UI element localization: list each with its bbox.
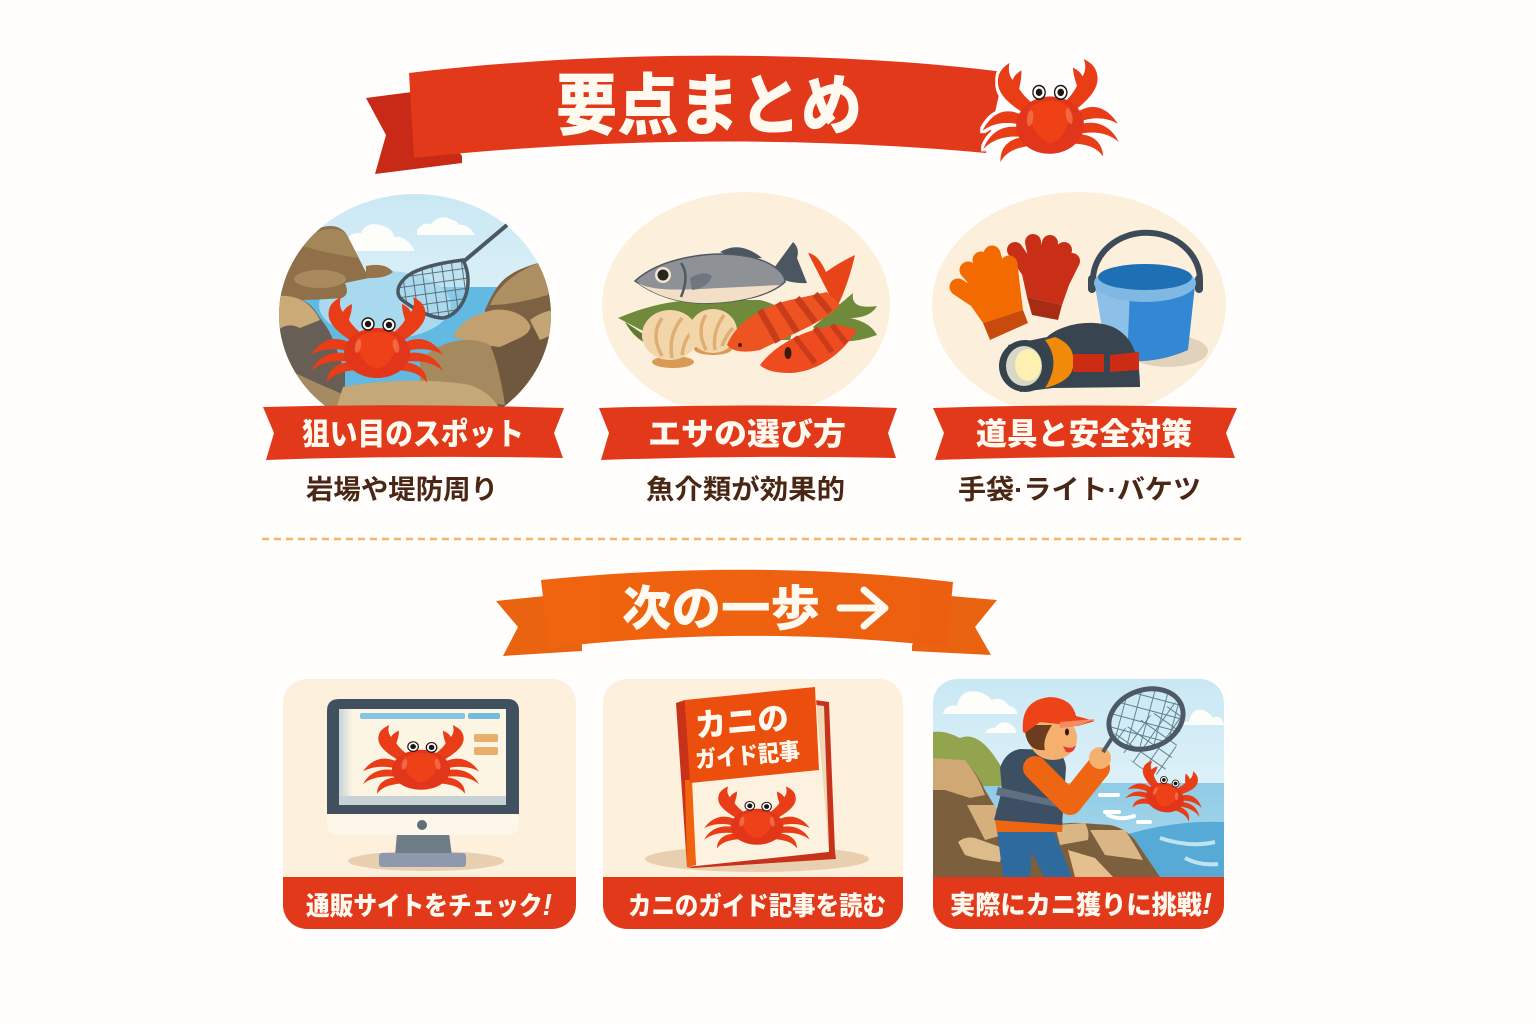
book subtitle: ガイド記事 [694, 738, 801, 773]
card: shop site [283, 679, 576, 929]
caption: 魚介類が効果的 [646, 474, 845, 505]
heading: 次の一歩 [622, 583, 820, 636]
right tail [912, 596, 997, 655]
icon: crab [311, 297, 443, 383]
ribbon: spot [263, 405, 564, 460]
icon: arrow [840, 590, 885, 626]
card: guide article [603, 679, 903, 929]
panel: spot [263, 190, 564, 505]
illustration: fish, clams and bait [602, 192, 890, 418]
banner tail [366, 92, 462, 174]
illustration: rocky shore with crab and net [279, 194, 551, 406]
banner body [541, 570, 953, 648]
label text: カニのガイド記事を読む [628, 891, 886, 921]
caption: 岩場や堤防周り [306, 475, 498, 505]
label bar [283, 877, 576, 929]
illustration: person catching crab at shore [933, 679, 1224, 884]
banner body [409, 56, 1004, 158]
title text: 要点まとめ [556, 69, 862, 144]
ribbon label: エサの選び方 [648, 417, 846, 452]
icon: guide book [645, 687, 869, 872]
illustration: gloves, bucket and headlamp [932, 192, 1226, 418]
label bar [603, 877, 903, 929]
title banner [366, 56, 1004, 174]
icon: hand net [398, 225, 507, 318]
label text: 実際にカニ獲りに挑戦! [950, 886, 1212, 921]
label text: 通販サイトをチェック! [306, 887, 552, 922]
next step banner [496, 570, 997, 656]
ribbon label: 道具と安全対策 [976, 417, 1192, 452]
panel: gear [932, 192, 1237, 505]
icon: title crab [979, 57, 1120, 163]
ribbon: gear [933, 406, 1237, 460]
caption: 手袋·ライト·バケツ [958, 475, 1201, 505]
panel: bait [599, 192, 897, 505]
ribbon label: 狙い目のスポット [302, 417, 524, 452]
ribbon: bait [599, 406, 897, 460]
book title: カニの [693, 700, 790, 744]
left tail [496, 596, 582, 656]
icon: monitor [327, 699, 519, 871]
label bar [933, 877, 1224, 929]
card: try crab catching [933, 679, 1224, 929]
